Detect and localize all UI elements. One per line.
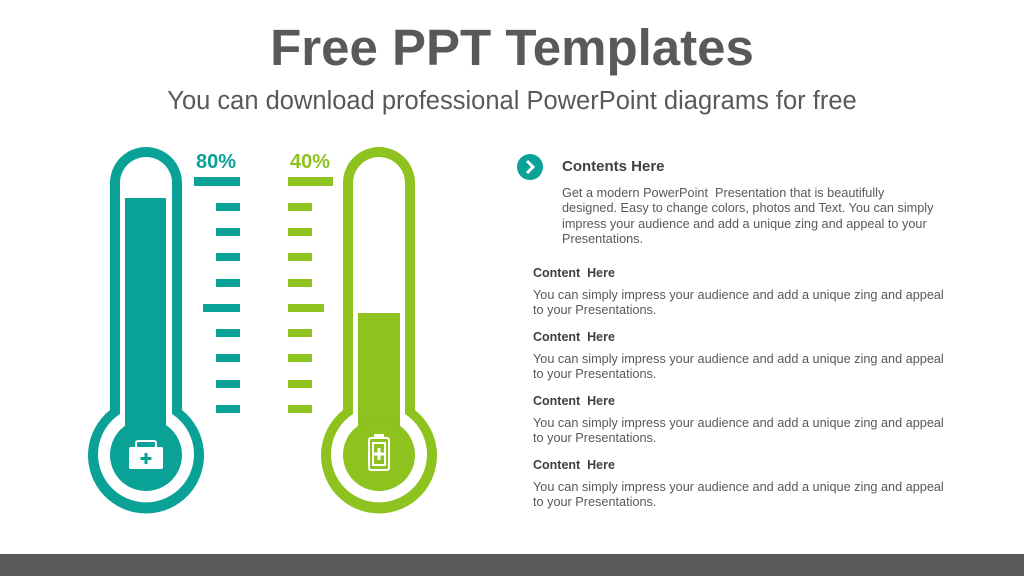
label: 40%: 40% <box>290 151 330 173</box>
title: Free PPT Templates <box>270 19 754 76</box>
heading: Contents Here: Contents Here <box>562 158 665 175</box>
item 3: to your Presentations. <box>533 431 656 445</box>
text: intro: Presentations. <box>562 232 643 246</box>
thermometer: teal 80% <box>88 147 204 513</box>
item 2: to your Presentations. <box>533 367 656 381</box>
icon: medical kit <box>129 441 163 469</box>
item 4 <box>533 458 944 509</box>
thermometer: green 40% <box>321 147 437 513</box>
text: intro: designed. Easy to change colors, photos and Text. You can simply <box>562 201 933 215</box>
thermometers chart <box>88 147 437 514</box>
item 1 <box>533 266 944 317</box>
ticks: green <box>288 177 333 413</box>
item 2 <box>533 330 944 381</box>
item 1: You can simply impress your audience and add a unique zing and appeal <box>533 288 944 302</box>
icon: battery <box>369 438 389 470</box>
footer bar <box>0 554 1024 576</box>
item 2: Content Here <box>533 330 615 344</box>
item 4: to your Presentations. <box>533 495 656 509</box>
item 1: Content Here <box>533 266 615 280</box>
item 1: to your Presentations. <box>533 303 656 317</box>
item 2: You can simply impress your audience and add a unique zing and appeal <box>533 352 944 366</box>
item 4: You can simply impress your audience and add a unique zing and appeal <box>533 480 944 494</box>
text: intro: Get a modern PowerPoint Presentation that is beautifully <box>562 186 884 200</box>
item 4: Content Here <box>533 458 615 472</box>
ticks: teal <box>194 177 240 413</box>
subtitle: You can download professional PowerPoint diagrams for free <box>167 87 857 115</box>
item 3: You can simply impress your audience and add a unique zing and appeal <box>533 416 944 430</box>
text: intro: impress your audience and add a unique zing and appeal to your <box>562 217 927 231</box>
text: intro <box>562 186 934 246</box>
label: 80%: 80% <box>196 151 236 173</box>
item 3 <box>533 394 944 445</box>
item 3: Content Here <box>533 394 615 408</box>
icon: chevron circle <box>517 154 543 180</box>
